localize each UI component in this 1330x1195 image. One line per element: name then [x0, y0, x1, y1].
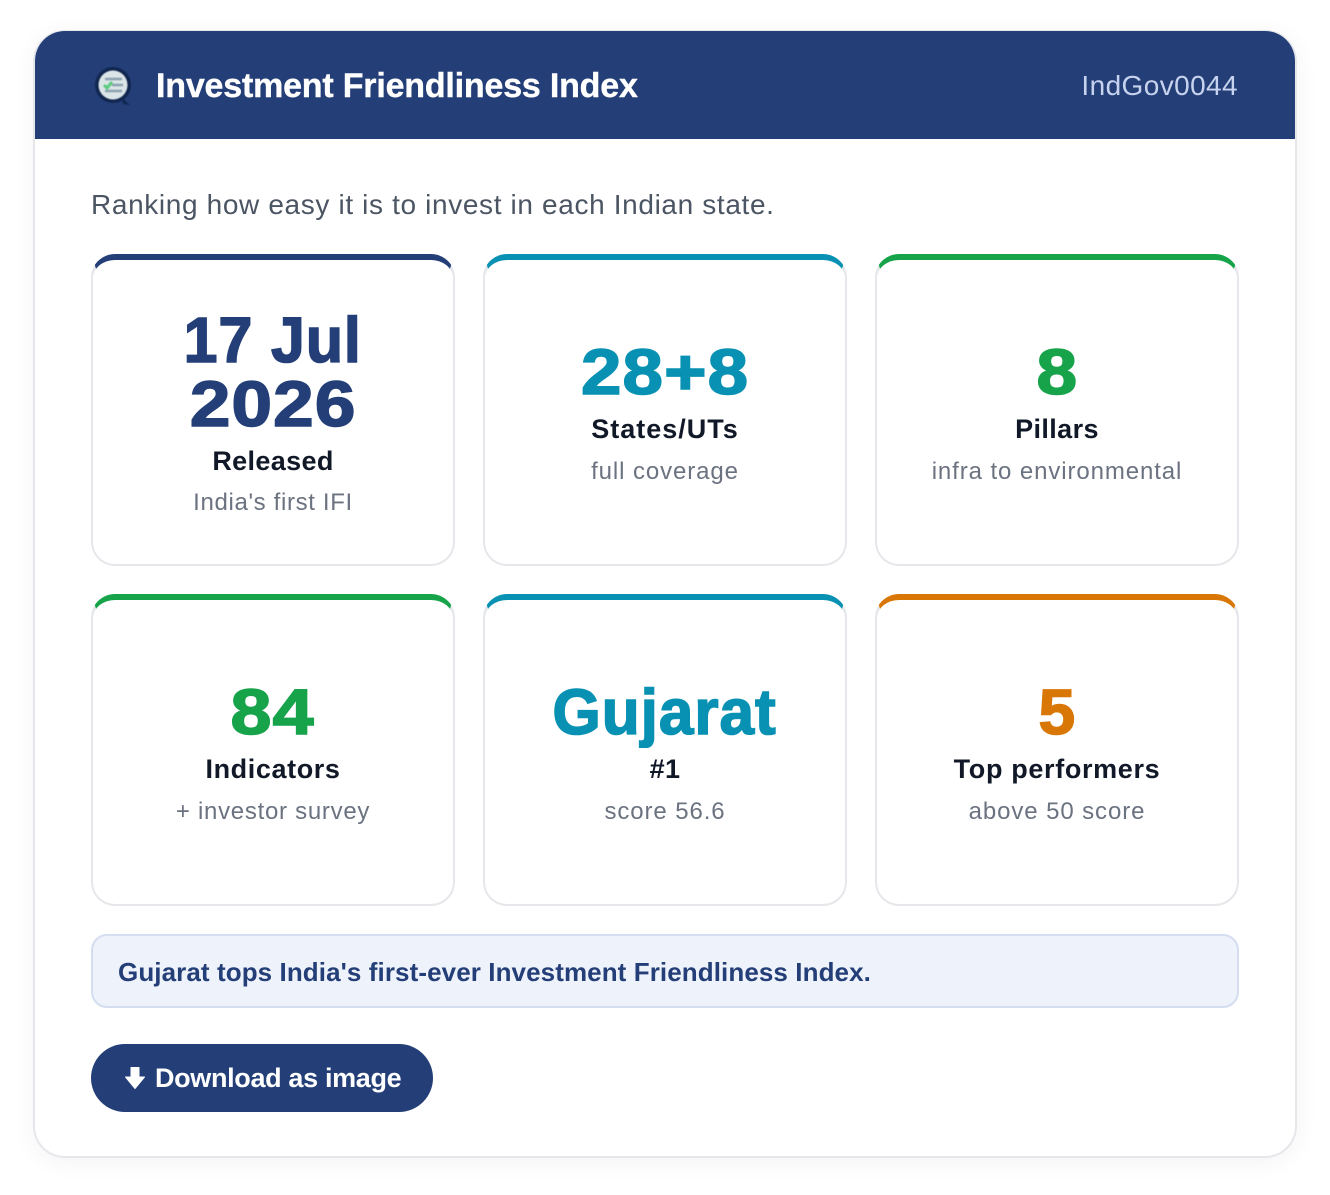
- note: survey: + investor survey: [176, 798, 370, 825]
- intro text: Ranking how easy it is to invest in each Indian state.: [91, 189, 775, 220]
- download button: [91, 1044, 433, 1112]
- panel: released date: [91, 254, 455, 566]
- callout: Gujarat tops India's first-ever Investment Friendliness Index.: [118, 957, 871, 987]
- panel: indicators: [91, 594, 455, 906]
- panel: top performers: [875, 594, 1239, 906]
- title: Investment Friendliness Index: [156, 67, 638, 105]
- label: States/UTs: States/UTs: [591, 414, 739, 444]
- big value: performers: 5: [1038, 676, 1076, 748]
- callout: [91, 934, 1239, 1008]
- note: score: score 56.6: [604, 798, 726, 825]
- note: first IFI: India's first IFI: [193, 489, 353, 516]
- panel: coverage: [483, 254, 847, 566]
- big value: indicators: 84: [231, 676, 315, 748]
- button label: Download as image: [155, 1063, 401, 1093]
- label: Indicators: Indicators: [205, 754, 341, 784]
- big value: date: 2026: [190, 368, 356, 440]
- header band: [35, 31, 1295, 139]
- label: rank: #1: [650, 754, 680, 784]
- panel: pillars: [875, 254, 1239, 566]
- label: released: Released: [212, 446, 334, 476]
- icon: down arrow: [125, 1067, 145, 1089]
- label: Top performers: Top performers: [954, 754, 1160, 784]
- big value: states and UTs: 28+8: [581, 336, 749, 408]
- label: Pillars: Pillars: [1015, 414, 1099, 444]
- big value: date: 17 Jul: [184, 304, 362, 376]
- note: coverage: full coverage: [591, 458, 739, 485]
- dataset code: IndGov0044: [1081, 70, 1238, 101]
- icon: logo magnifier with checklist: [94, 66, 132, 106]
- big value: Gujarat: Gujarat: [553, 676, 777, 748]
- note: pillar range: infra to environmental: [932, 458, 1182, 485]
- big value: pillars: 8: [1036, 336, 1078, 408]
- note: score threshold: above 50 score: [969, 798, 1145, 825]
- panel: top state: [483, 594, 847, 906]
- big value: date: [184, 304, 362, 440]
